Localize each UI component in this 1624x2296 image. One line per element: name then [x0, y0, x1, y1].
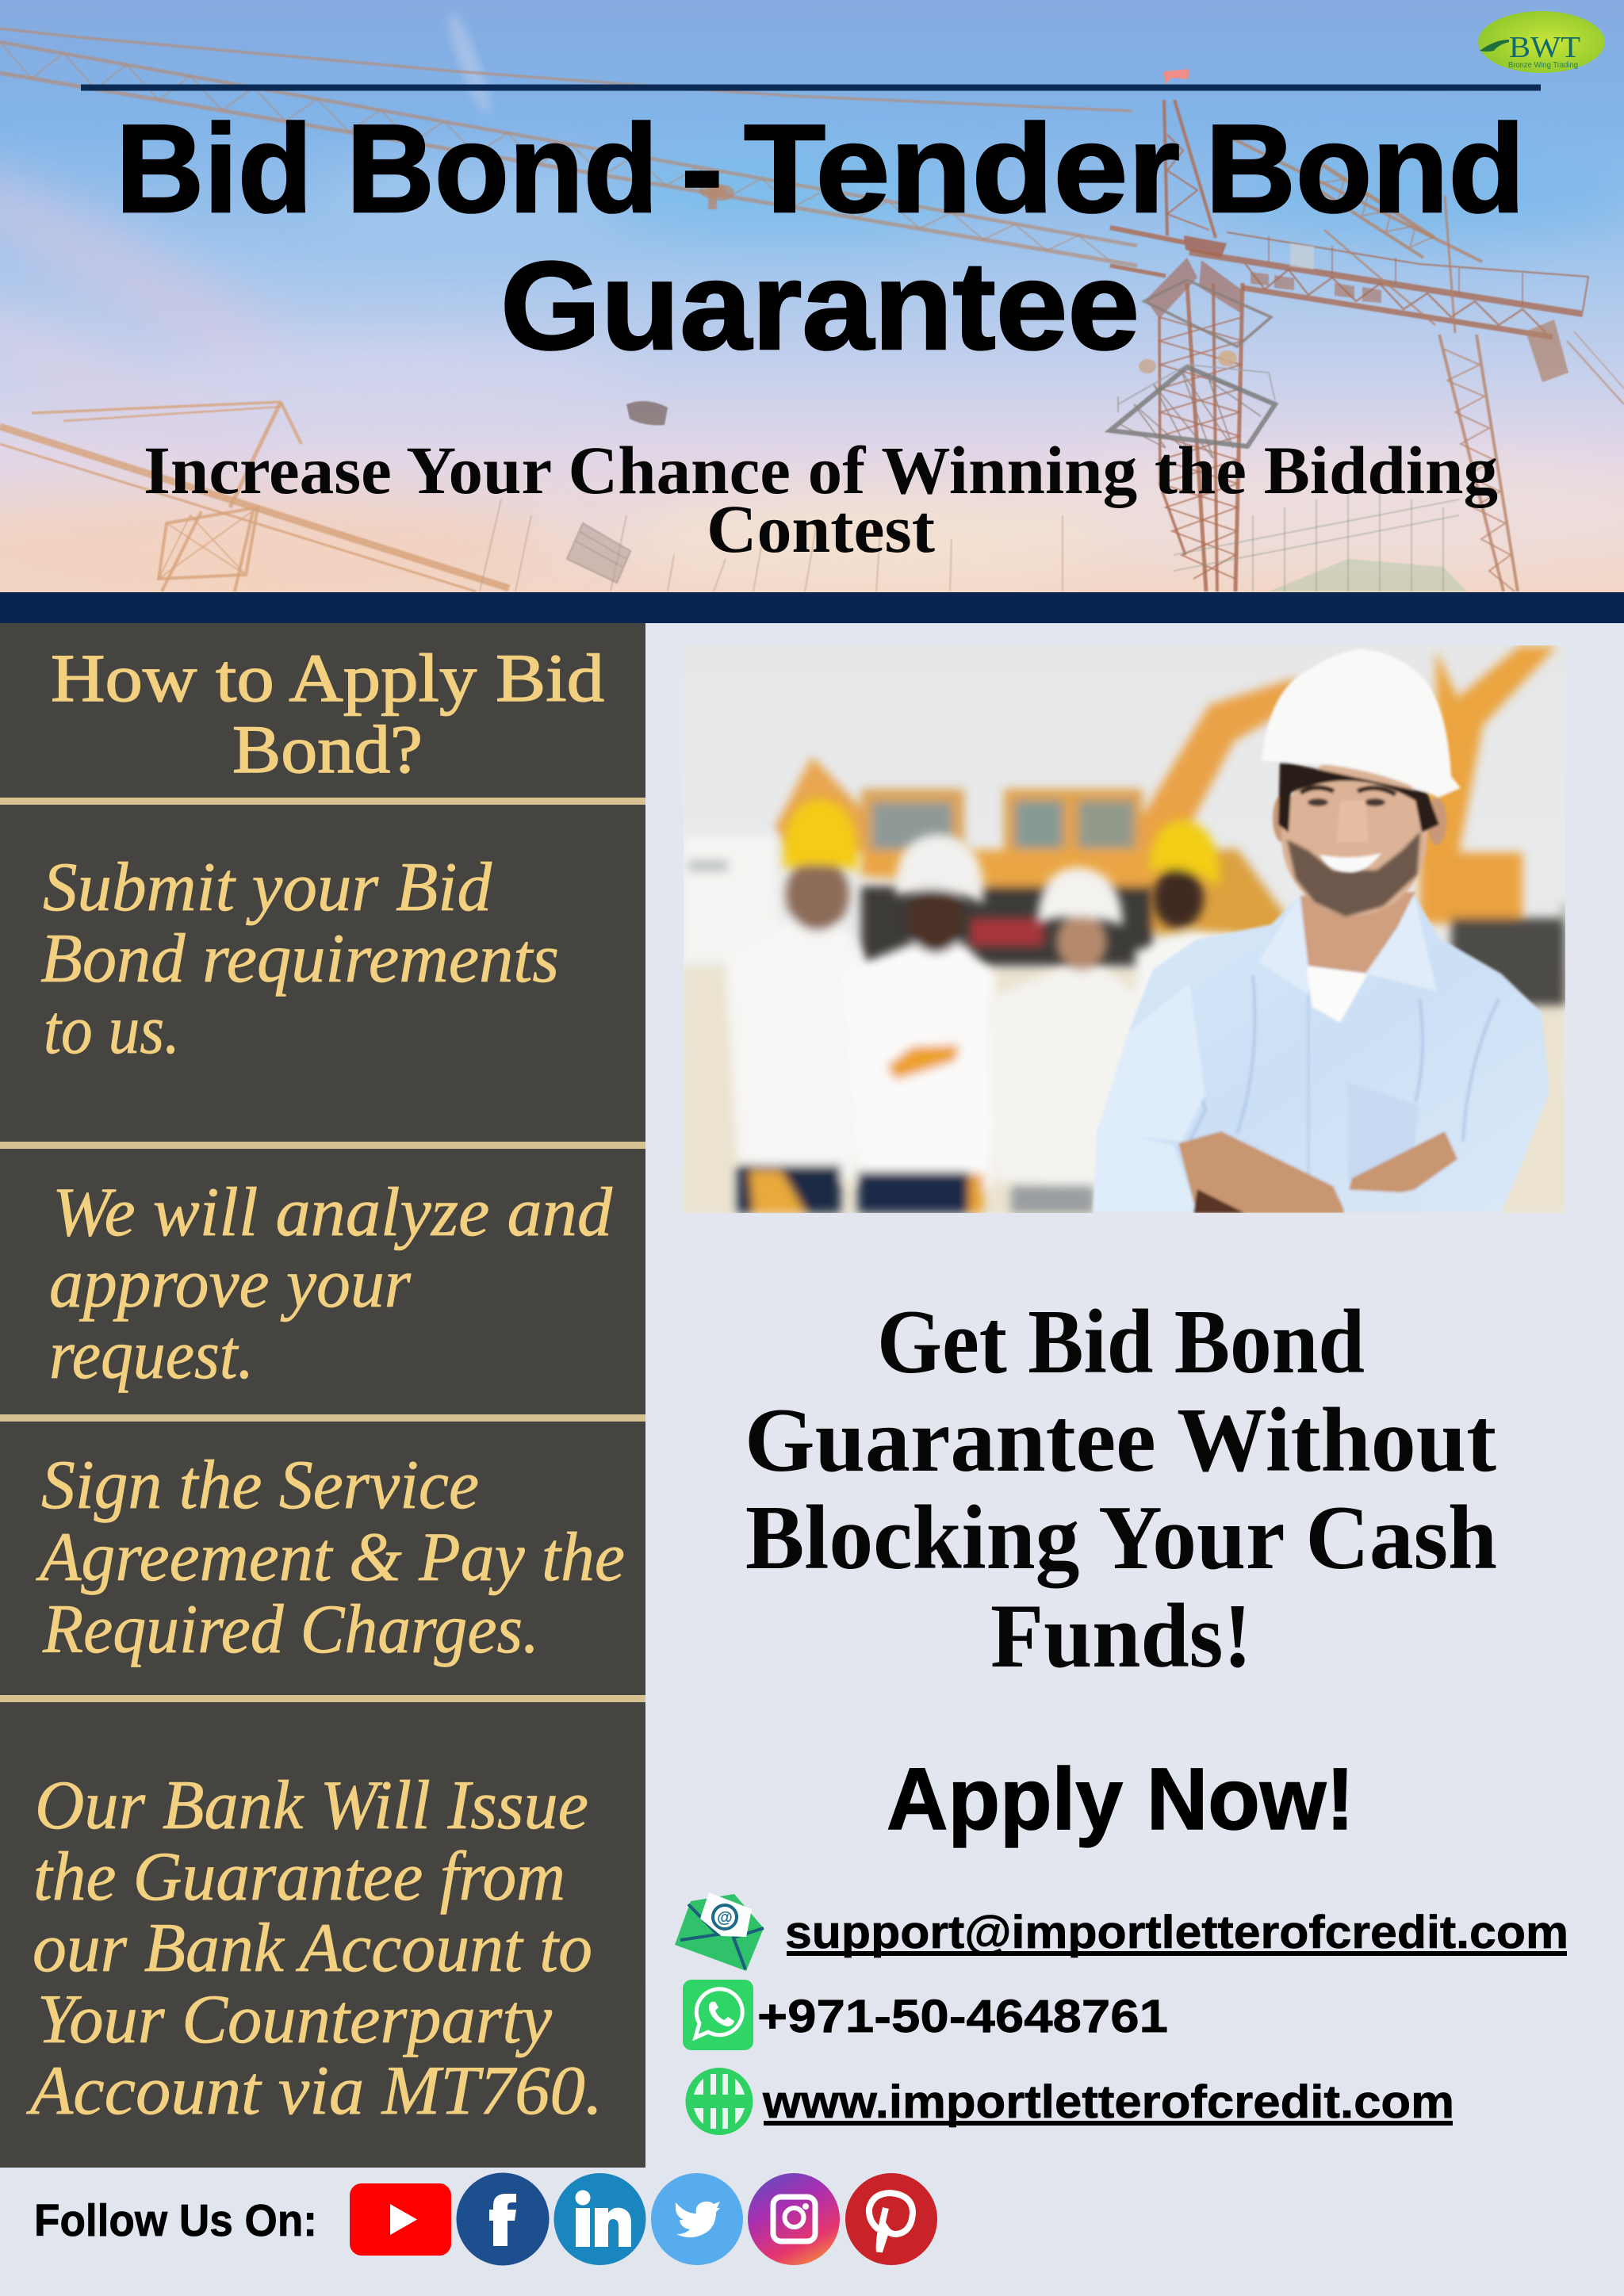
lower load	[567, 523, 630, 583]
face	[1281, 757, 1427, 916]
icon: whatsapp	[683, 1980, 753, 2050]
icon: email envelope	[675, 1892, 764, 1971]
worker 1	[725, 918, 864, 1181]
eyes and brows	[1308, 798, 1328, 806]
subtitle: Contest	[707, 491, 935, 567]
arms	[1178, 1131, 1346, 1213]
main man	[1093, 649, 1549, 1213]
right jib	[1189, 232, 1588, 337]
step 1: to us.	[44, 992, 180, 1069]
step 4: Your Counterparty	[37, 1981, 553, 2058]
step 3: Sign the Service	[41, 1447, 479, 1524]
step 2: We will analyze and	[52, 1174, 613, 1251]
second crane	[1233, 139, 1518, 591]
tower legs	[1187, 283, 1206, 591]
step 1: Bond requirements	[40, 920, 559, 997]
title	[116, 99, 1525, 376]
heading: how to apply	[51, 640, 604, 787]
icon: globe	[685, 2068, 753, 2135]
beard	[1287, 832, 1420, 916]
blurred workers	[725, 799, 1237, 1213]
icon: twitter	[651, 2173, 743, 2265]
header panel: crane photo background	[0, 0, 1624, 595]
neck	[1300, 892, 1415, 974]
step 1	[40, 849, 559, 1069]
heading: how to apply: Bond?	[232, 711, 423, 787]
follow us label: Follow Us On:	[34, 2195, 317, 2246]
blurred machinery	[684, 646, 1565, 1005]
icon: linkedin	[553, 2173, 645, 2265]
callout: get bid bond: Funds!	[990, 1586, 1252, 1686]
top rule	[81, 84, 1541, 90]
phone number: +971-50-4648761	[757, 1991, 1168, 2042]
icon: youtube	[350, 2183, 451, 2256]
icon: email envelope: @	[717, 1909, 733, 1927]
shirt	[1093, 894, 1549, 1213]
icon: instagram	[748, 2173, 840, 2265]
crane flag	[1163, 69, 1189, 84]
subtitle	[144, 432, 1498, 567]
title: Tender	[744, 99, 1180, 239]
step 1: Submit your Bid	[43, 849, 492, 926]
step 4: Account via MT760.	[26, 2053, 603, 2130]
subtitle: Increase Your Chance of Winning the Bidding	[144, 432, 1498, 508]
step 4	[26, 1767, 603, 2130]
trolley on jib	[699, 182, 725, 198]
worker 3	[986, 969, 1146, 1189]
callout: get bid bond: Blocking Your Cash	[745, 1487, 1497, 1588]
step 3: Agreement & Pay the	[36, 1519, 625, 1596]
logo: BWT: BWT	[1509, 31, 1580, 64]
apply now: Apply Now!	[887, 1751, 1354, 1848]
worker 4	[1135, 932, 1237, 1007]
step 4: our Bank Account to	[33, 1910, 592, 1987]
platforms	[1144, 280, 1271, 346]
icon: facebook	[457, 2172, 549, 2266]
step 3: Required Charges.	[42, 1591, 539, 1668]
logo: BWT: Bronze Wing Trading	[1508, 61, 1578, 70]
title: Bond	[1205, 99, 1525, 239]
callout: get bid bond	[745, 1292, 1497, 1686]
navy band	[0, 592, 1624, 623]
step 3	[36, 1447, 625, 1668]
collar	[1258, 897, 1308, 995]
title: -	[681, 99, 723, 239]
step 4: the Guarantee from	[33, 1839, 565, 1915]
logo: BWT	[1478, 11, 1605, 73]
icon: pinterest	[845, 2173, 937, 2265]
callout: get bid bond: Guarantee Without	[745, 1390, 1496, 1490]
counterweight	[1526, 320, 1568, 382]
title: Bid Bond	[116, 99, 658, 239]
scaffold rods	[480, 499, 1063, 591]
main mast	[1110, 100, 1275, 591]
upper left jib chords	[0, 29, 1132, 111]
panel: how to apply steps	[0, 623, 645, 2168]
email address: support@importletterofcredit.com	[785, 1907, 1568, 1958]
ears	[1273, 794, 1292, 842]
building under construction	[1174, 492, 1467, 591]
step 2	[49, 1174, 613, 1394]
smile	[1320, 853, 1381, 872]
step 2: approve your	[49, 1246, 412, 1322]
helmet	[1262, 649, 1461, 798]
heading: how to apply: How to Apply Bid	[51, 640, 604, 716]
step 4: Our Bank Will Issue	[35, 1767, 588, 1844]
hanging load	[626, 401, 668, 425]
title: Guarantee	[500, 236, 1139, 376]
website address: www.importletterofcredit.com	[762, 2076, 1454, 2128]
small crane lower left	[0, 402, 509, 591]
worker 2	[843, 943, 995, 1189]
photo: construction workers	[684, 645, 1565, 1213]
callout: get bid bond: Get Bid Bond	[877, 1292, 1365, 1392]
hair	[1278, 761, 1439, 832]
step 2: request.	[49, 1317, 254, 1394]
